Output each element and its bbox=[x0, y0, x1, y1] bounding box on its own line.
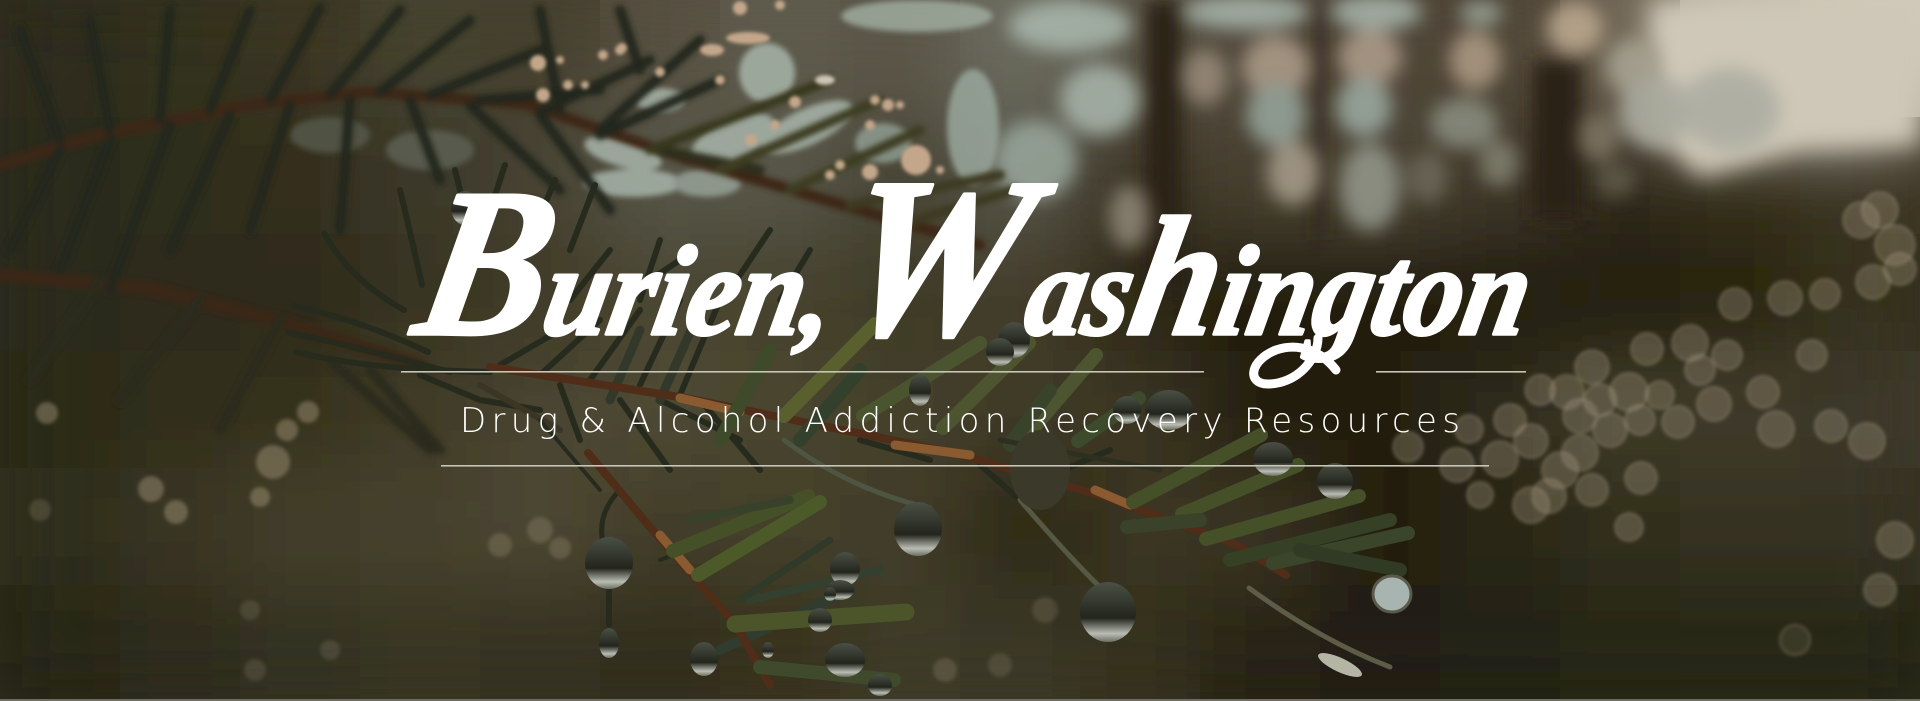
dark tree trunks bbox=[1164, 0, 1557, 300]
thin stems carrying droplets bbox=[784, 440, 1390, 667]
water droplets bbox=[451, 191, 1411, 696]
title swash: descender of g bbox=[1254, 338, 1336, 384]
lower rule bbox=[441, 465, 1489, 467]
orange bark highlights bbox=[660, 398, 1130, 570]
bokeh: upper background bbox=[993, 0, 1780, 249]
title text: Burien,Washington bbox=[399, 131, 1561, 384]
sharp pine branch in focus bbox=[288, 165, 1408, 685]
bokeh: lower left bbox=[29, 401, 1058, 682]
bright sky at top right bbox=[1650, 0, 1920, 178]
subtitle: Drug & Alcohol Addiction Recovery Resources bbox=[460, 401, 1460, 441]
thick green needles bbox=[673, 324, 1408, 680]
small out-of-focus droplets on upper branch bbox=[530, 0, 944, 180]
blurred upper pine branch bbox=[0, 8, 1015, 450]
bottom edge bbox=[0, 699, 1920, 701]
thin dark needles bbox=[288, 165, 1110, 650]
title bbox=[399, 131, 1561, 384]
branch stems bbox=[490, 367, 1286, 685]
bokeh: lower right pine bbox=[1393, 192, 1916, 655]
sky patches behind upper branch bbox=[290, 0, 999, 197]
upper rule bbox=[401, 371, 1526, 373]
